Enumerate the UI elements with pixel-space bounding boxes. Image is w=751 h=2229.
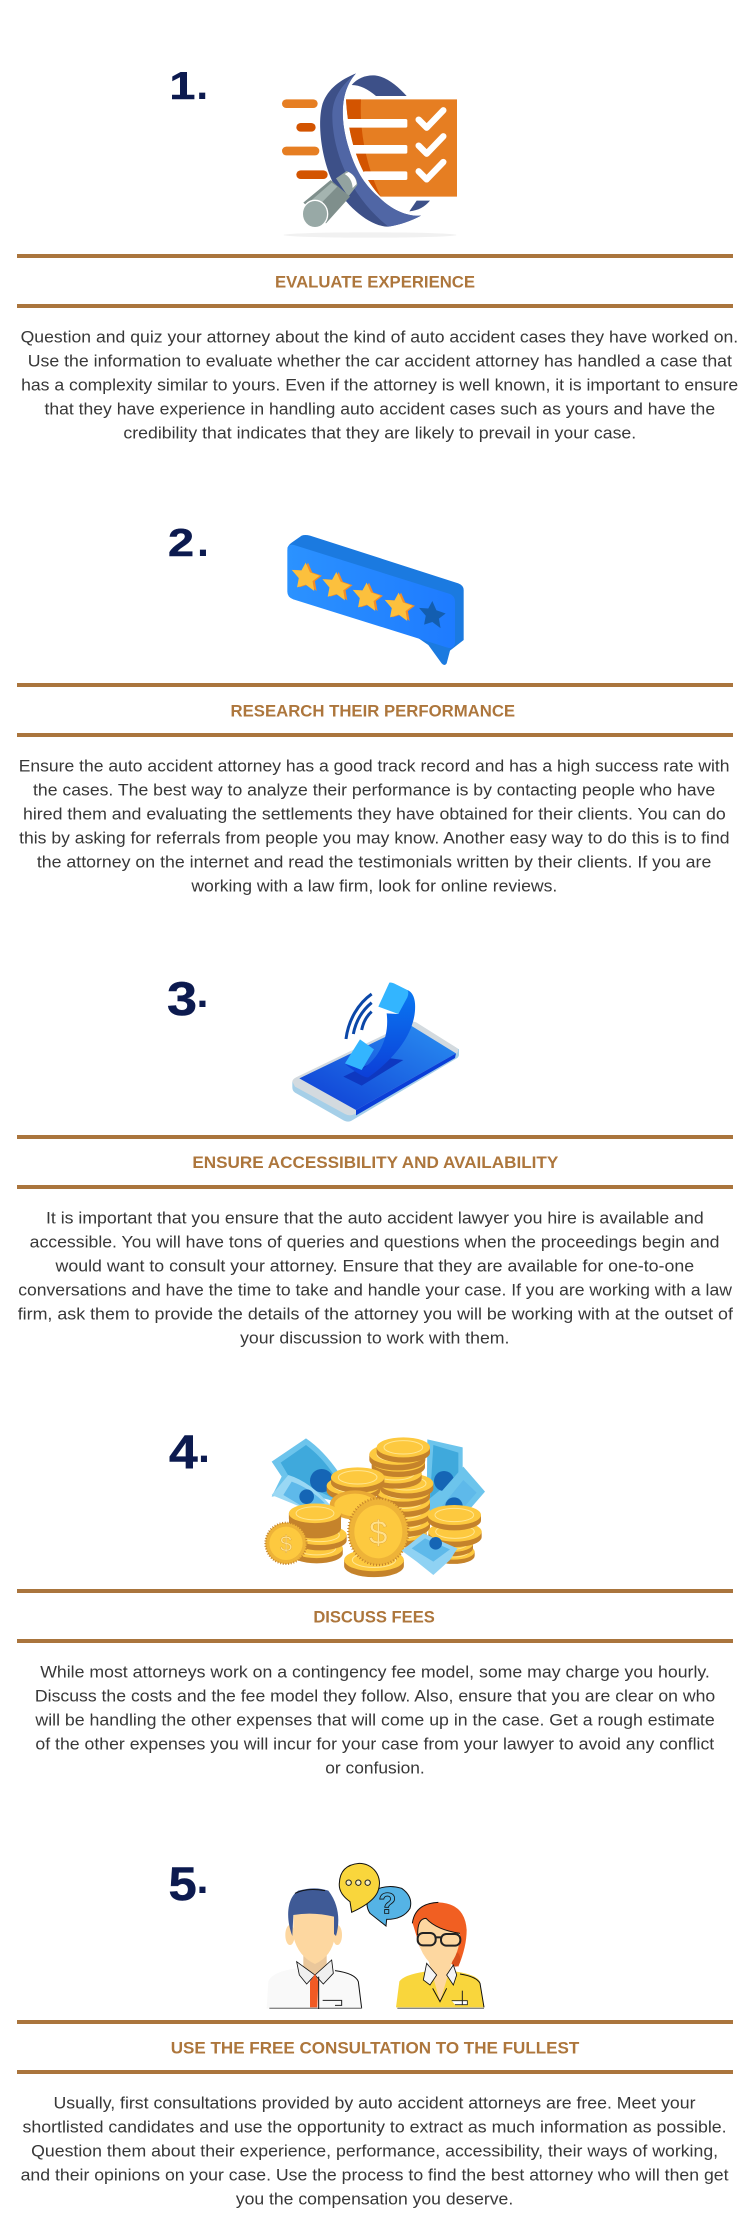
number 5 bbox=[168, 1855, 208, 1911]
section 5: use the free consultation bbox=[17, 1855, 733, 2208]
body text: firm, ask them to provide the details of the attorney you will be working with at the outset of bbox=[18, 1305, 733, 1323]
top divider bbox=[17, 1589, 733, 1593]
number 1: 1 bbox=[169, 65, 195, 108]
number 2: . bbox=[197, 518, 209, 566]
body text: Discuss the costs and the fee model they follow. Also, ensure that you are clear on who bbox=[35, 1687, 715, 1705]
body text: the cases. The best way to analyze their performance is by contacting people who have bbox=[33, 781, 715, 799]
body text: this by asking for referrals from people you may know. Another easy way to do this is to find bbox=[19, 829, 730, 847]
section 3: ensure accessibility and availability bbox=[17, 969, 733, 1347]
number 5: 5 bbox=[168, 1859, 197, 1911]
number 5: . bbox=[196, 1855, 208, 1903]
number 1 bbox=[169, 61, 208, 109]
icon: stacks of coins and banknotes: $ bbox=[280, 1531, 292, 1556]
icon: magnifying glass over checklist bbox=[282, 73, 457, 238]
bottom divider bbox=[17, 1185, 733, 1189]
body text: accessible. You will have tons of queries and questions when the proceedings begin and bbox=[30, 1233, 719, 1251]
number 1: . bbox=[196, 61, 208, 109]
body text: Ensure the auto accident attorney has a good track record and has a high success rate with bbox=[19, 757, 730, 775]
section 4: discuss fees bbox=[17, 1424, 733, 1777]
icon: stacks of coins and banknotes bbox=[265, 1437, 485, 1577]
body text: has a complexity similar to yours. Even if the attorney is well known, it is important to ensure bbox=[21, 376, 738, 394]
body text: Question them about their experience, performance, accessibility, their ways of working, bbox=[31, 2142, 718, 2160]
body text bbox=[19, 757, 730, 895]
body text bbox=[21, 328, 738, 442]
number 2 bbox=[168, 518, 209, 566]
heading: EVALUATE EXPERIENCE bbox=[275, 272, 475, 291]
body text: shortlisted candidates and use the opportunity to extract as much information as possible. bbox=[22, 2118, 727, 2136]
number 3: 3 bbox=[167, 972, 197, 1025]
body text: will be handling the other expenses that will come up in the case. Get a rough estimate bbox=[34, 1711, 715, 1729]
body text: credibility that indicates that they are likely to prevail in your case. bbox=[123, 424, 636, 442]
body text bbox=[21, 2094, 729, 2208]
body text: hired them and evaluating the settlements they have obtained for their clients. You can do bbox=[23, 805, 726, 823]
number 3 bbox=[167, 969, 208, 1025]
bottom divider bbox=[17, 304, 733, 308]
top divider bbox=[17, 254, 733, 258]
icon: review speech bubble with stars bbox=[287, 535, 464, 665]
body text: that they have experience in handling auto accident cases such as yours and have the bbox=[44, 400, 715, 418]
body text: Use the information to evaluate whether the car accident attorney has handled a case that bbox=[28, 352, 732, 370]
heading: DISCUSS FEES bbox=[313, 1607, 435, 1626]
icon: stacks of coins and banknotes: $ bbox=[369, 1515, 388, 1552]
number 4: . bbox=[198, 1424, 210, 1472]
top divider bbox=[17, 1135, 733, 1139]
number 3: . bbox=[196, 969, 208, 1017]
heading: RESEARCH THEIR PERFORMANCE bbox=[231, 701, 515, 720]
bottom divider bbox=[17, 733, 733, 737]
body text: of the other expenses you will incur for your case from your lawyer to avoid any conflict bbox=[35, 1735, 715, 1753]
number 2: 2 bbox=[168, 522, 194, 565]
heading: USE THE FREE CONSULTATION TO THE FULLEST bbox=[171, 2038, 580, 2057]
section 1: evaluate experience bbox=[17, 61, 738, 442]
number 4: 4 bbox=[169, 1426, 198, 1478]
body text: conversations and have the time to take and handle your case. If you are working with a law bbox=[18, 1281, 732, 1299]
heading: ENSURE ACCESSIBILITY AND AVAILABILITY bbox=[192, 1153, 559, 1172]
icon: smartphone with handset bbox=[292, 982, 459, 1122]
body text: the attorney on the internet and read the testimonials written by their clients. If you are bbox=[37, 853, 711, 871]
section 2: research their performance bbox=[17, 518, 733, 895]
body text: your discussion to work with them. bbox=[240, 1329, 509, 1347]
top divider bbox=[17, 2020, 733, 2024]
icon: man and woman talking with speech bubbles bbox=[267, 1863, 484, 2009]
body text: would want to consult your attorney. Ensure that they are available for one-to-one bbox=[54, 1257, 694, 1275]
body text: working with a law firm, look for online reviews. bbox=[190, 877, 557, 895]
body text bbox=[34, 1663, 715, 1777]
icon: man and woman talking with speech bubbles: ? bbox=[378, 1887, 396, 1920]
bottom divider bbox=[17, 2070, 733, 2074]
body text: you the compensation you deserve. bbox=[236, 2190, 513, 2208]
top divider bbox=[17, 683, 733, 687]
body text bbox=[18, 1209, 733, 1347]
body text: and their opinions on your case. Use the process to find the best attorney who will then get bbox=[21, 2166, 729, 2184]
body text: or confusion. bbox=[325, 1759, 425, 1777]
number 4 bbox=[169, 1424, 210, 1478]
body text: While most attorneys work on a contingency fee model, some may charge you hourly. bbox=[40, 1663, 710, 1681]
body text: It is important that you ensure that the auto accident lawyer you hire is available and bbox=[46, 1209, 704, 1227]
bottom divider bbox=[17, 1639, 733, 1643]
body text: Question and quiz your attorney about the kind of auto accident cases they have worked on. bbox=[21, 328, 738, 346]
body text: Usually, first consultations provided by auto accident attorneys are free. Meet your bbox=[54, 2094, 696, 2112]
